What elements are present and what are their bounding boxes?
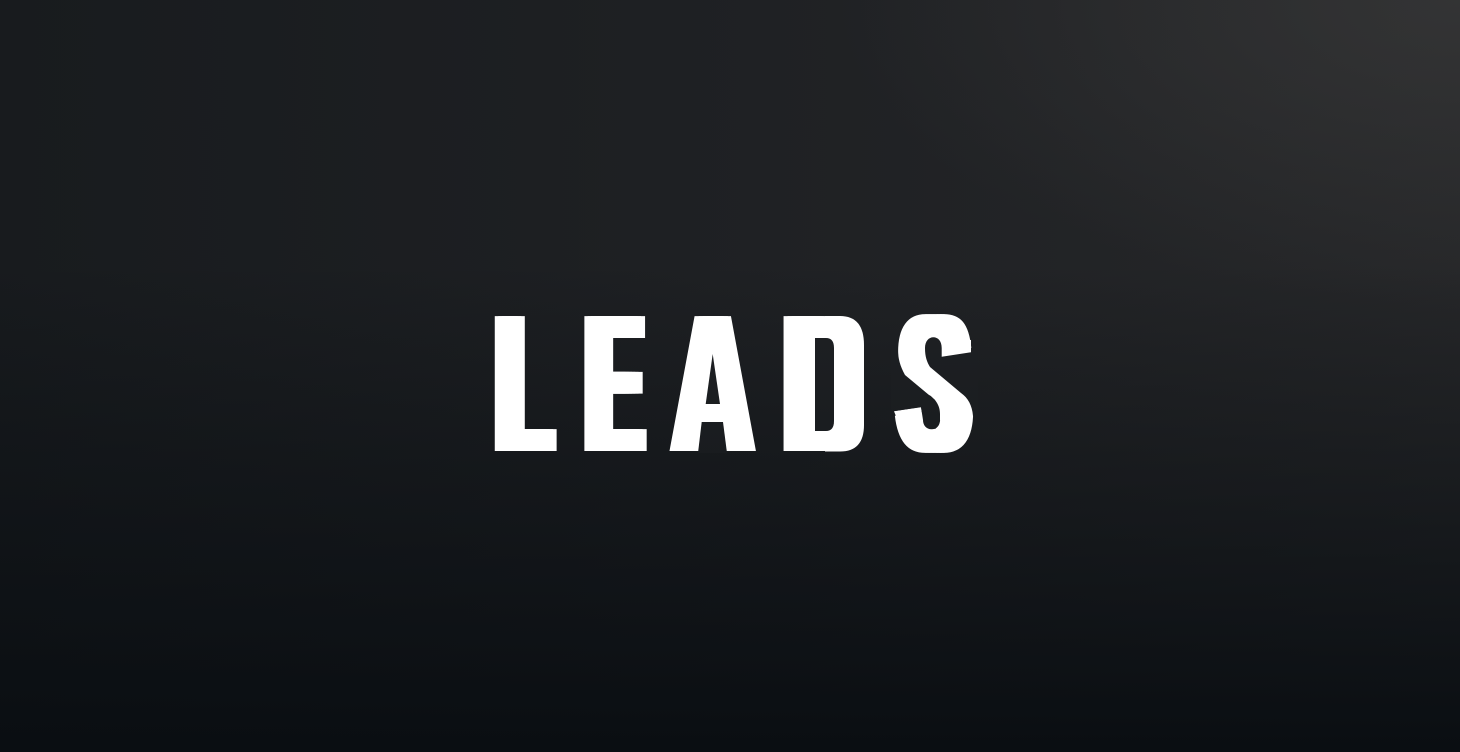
title: LEADS: D bbox=[777, 274, 848, 493]
title: LEADS: A bbox=[667, 274, 739, 493]
title: LEADS: E bbox=[579, 274, 633, 493]
title: LEADS bbox=[489, 274, 974, 493]
title: LEADS: L bbox=[489, 274, 542, 493]
title: LEADS: S bbox=[892, 274, 959, 493]
